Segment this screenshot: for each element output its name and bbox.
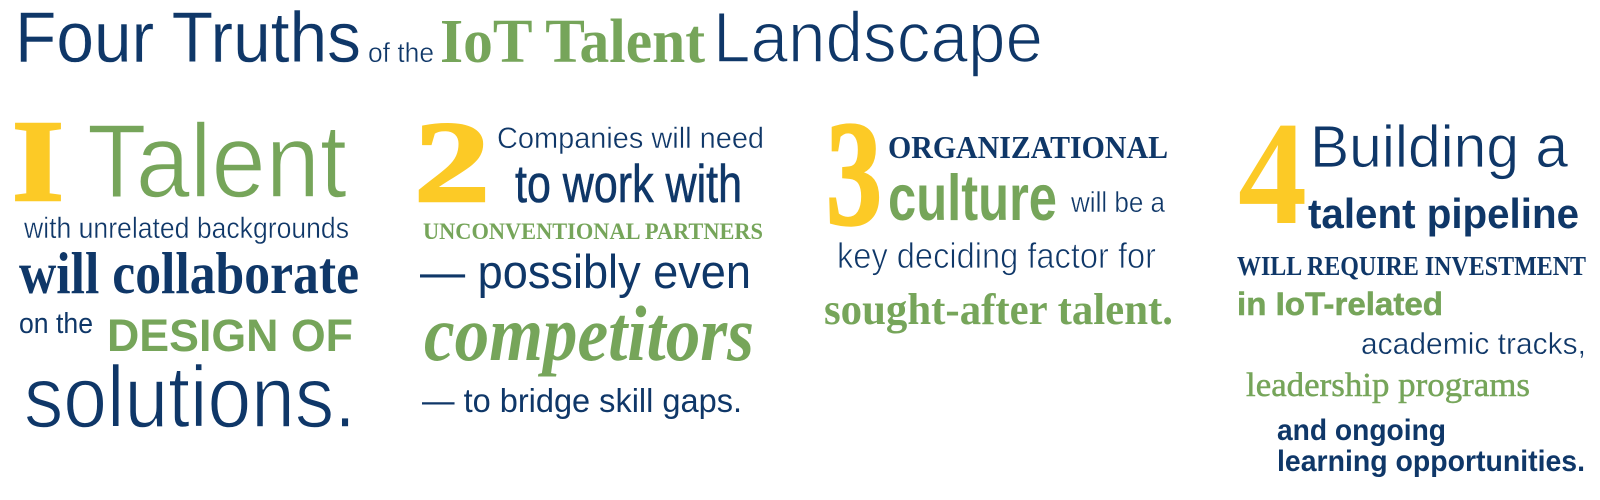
panel: truth 4: [1237, 92, 1586, 478]
text: ORGANIZATIONAL: ORGANIZATIONAL: [888, 129, 1168, 165]
text: Companies will need: Companies will need: [497, 122, 764, 155]
text: in IoT-related: in IoT-related: [1237, 286, 1443, 322]
text: academic tracks,: academic tracks,: [1361, 326, 1586, 361]
text: will be a: will be a: [1070, 187, 1166, 219]
text: possibly even: — possibly even: [420, 245, 751, 298]
text: Building a: Building a: [1310, 114, 1568, 180]
text: UNCONVENTIONAL PARTNERS: UNCONVENTIONAL PARTNERS: [423, 219, 763, 244]
text: talent pipeline: talent pipeline: [1308, 190, 1579, 237]
text: key deciding factor for: key deciding factor for: [837, 235, 1156, 276]
title: Landscape: [713, 0, 1043, 78]
text: to bridge skill gaps.: — to bridge skill gaps.: [422, 382, 742, 419]
text: solutions.: solutions.: [24, 349, 356, 446]
text: to work with: to work with: [515, 155, 742, 214]
panel: truth 1: [12, 98, 359, 446]
title: IoT Talent: [440, 8, 705, 76]
title: [15, 0, 1043, 78]
title: Four Truths: [15, 0, 361, 78]
text: and ongoing: and ongoing: [1277, 414, 1446, 447]
text: sought-after talent.: sought-after talent.: [824, 285, 1173, 334]
heading: Talent: Talent: [87, 103, 347, 220]
text: will collaborate: will collaborate: [19, 240, 359, 306]
panel: truth 3: [824, 91, 1173, 334]
numeral 2: 2: [414, 99, 490, 227]
text: competitors: competitors: [424, 290, 754, 377]
panel: truth 2: [414, 99, 764, 419]
text: leadership programs: leadership programs: [1246, 367, 1530, 404]
numeral 3: 3: [826, 91, 882, 257]
text: learning opportunities.: learning opportunities.: [1277, 445, 1585, 478]
text: with unrelated backgrounds: with unrelated backgrounds: [23, 212, 349, 245]
numeral 1: I: [12, 98, 64, 226]
text: on the: on the: [19, 308, 93, 340]
text: culture: culture: [888, 161, 1057, 234]
title: of the: [368, 37, 434, 68]
text: DESIGN OF: DESIGN OF: [107, 310, 353, 361]
numeral 4: 4: [1238, 92, 1307, 256]
